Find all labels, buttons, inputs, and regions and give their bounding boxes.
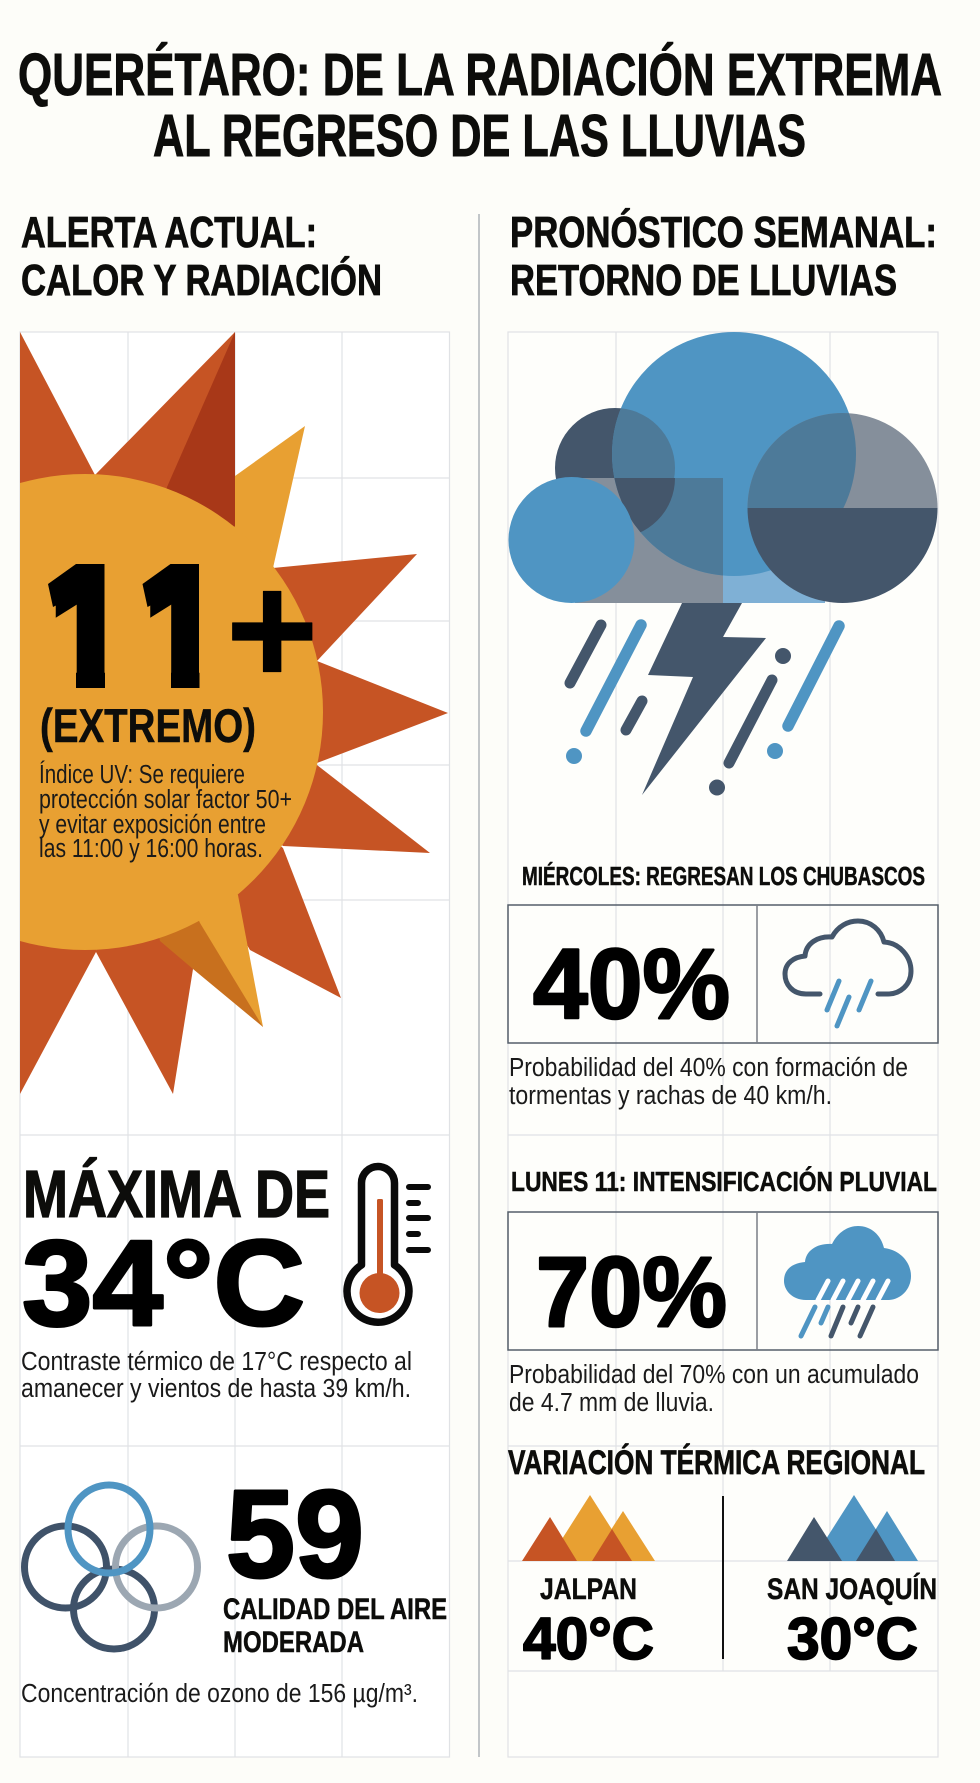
air quality description: Concentración de ozono de 156 µg/m³. (21, 1680, 418, 1708)
UV index value: + (226, 542, 318, 718)
title (18, 42, 942, 169)
description: 40 percent: tormentas y rachas de 40 km/h. (509, 1082, 832, 1110)
icon: sun (0, 332, 448, 1094)
UV description: las 11:00 y 16:00 horas. (39, 835, 263, 863)
UV description: y evitar exposición entre (39, 811, 266, 839)
temperature value: 34°C (22, 1215, 305, 1351)
40 percent value: 40% (533, 928, 730, 1039)
heading: alerta actual: ALERTA ACTUAL: (21, 208, 317, 257)
temperature description: Contraste térmico de 17°C respecto al (21, 1348, 412, 1376)
icon: rain streaks (566, 625, 839, 796)
description: 40 percent: Probabilidad del 40% con formación de (509, 1054, 908, 1082)
jalpan temperature: 40°C (523, 1606, 654, 1672)
UV description: Índice UV: Se requiere (39, 760, 245, 789)
heading: alerta actual: CALOR Y RADIACIÓN (21, 255, 382, 305)
UV description: protección solar factor 50+ (39, 786, 292, 814)
card: 70 percent (508, 1212, 938, 1350)
heading: alerta actual (21, 208, 382, 305)
temperature description: amanecer y vientos de hasta 39 km/h. (21, 1375, 411, 1403)
icon: outline rain cloud (785, 921, 911, 1026)
panel: right column grid (508, 332, 938, 1757)
icon: filled rain cloud (784, 1226, 911, 1336)
air quality label: CALIDAD DEL AIRE (223, 1593, 447, 1626)
card: 40 percent (508, 905, 938, 1043)
UV description (39, 760, 292, 863)
air quality label: MODERADA (223, 1626, 364, 1659)
jalpan (522, 1495, 655, 1672)
jalpan label: JALPAN (540, 1573, 637, 1606)
description: 70 percent: de 4.7 mm de lluvia. (509, 1389, 714, 1417)
icon: ozone rings (24, 1485, 198, 1649)
70 percent value: 70% (536, 1236, 727, 1347)
description: 40 percent (509, 1054, 908, 1110)
san joaquín temperature: 30°C (787, 1606, 918, 1672)
description: 70 percent (509, 1361, 919, 1417)
UV level label: (EXTREMO) (40, 699, 256, 752)
UV index value: 11 (46, 552, 223, 720)
san joaquín label: SAN JOAQUÍN (767, 1572, 937, 1606)
temperature description (21, 1348, 412, 1403)
regional divider (722, 1496, 724, 1659)
panel: left column grid (20, 332, 450, 1757)
air quality value: 59 (226, 1466, 364, 1604)
description: 70 percent: Probabilidad del 70% con un acumulado (509, 1361, 919, 1389)
heading: pronóstico semanal (510, 207, 937, 305)
air quality label (223, 1593, 447, 1659)
icon: storm cloud (508, 332, 938, 603)
UV index value (34, 542, 318, 720)
icon: blue mountains (787, 1495, 918, 1561)
icon: orange mountains (522, 1495, 655, 1561)
heading: máxima de: MÁXIMA DE (23, 1157, 330, 1232)
san joaquín (767, 1495, 937, 1672)
icon: thermometer (347, 1166, 428, 1322)
icon: lightning bolt (642, 603, 766, 795)
column divider (478, 214, 480, 1757)
